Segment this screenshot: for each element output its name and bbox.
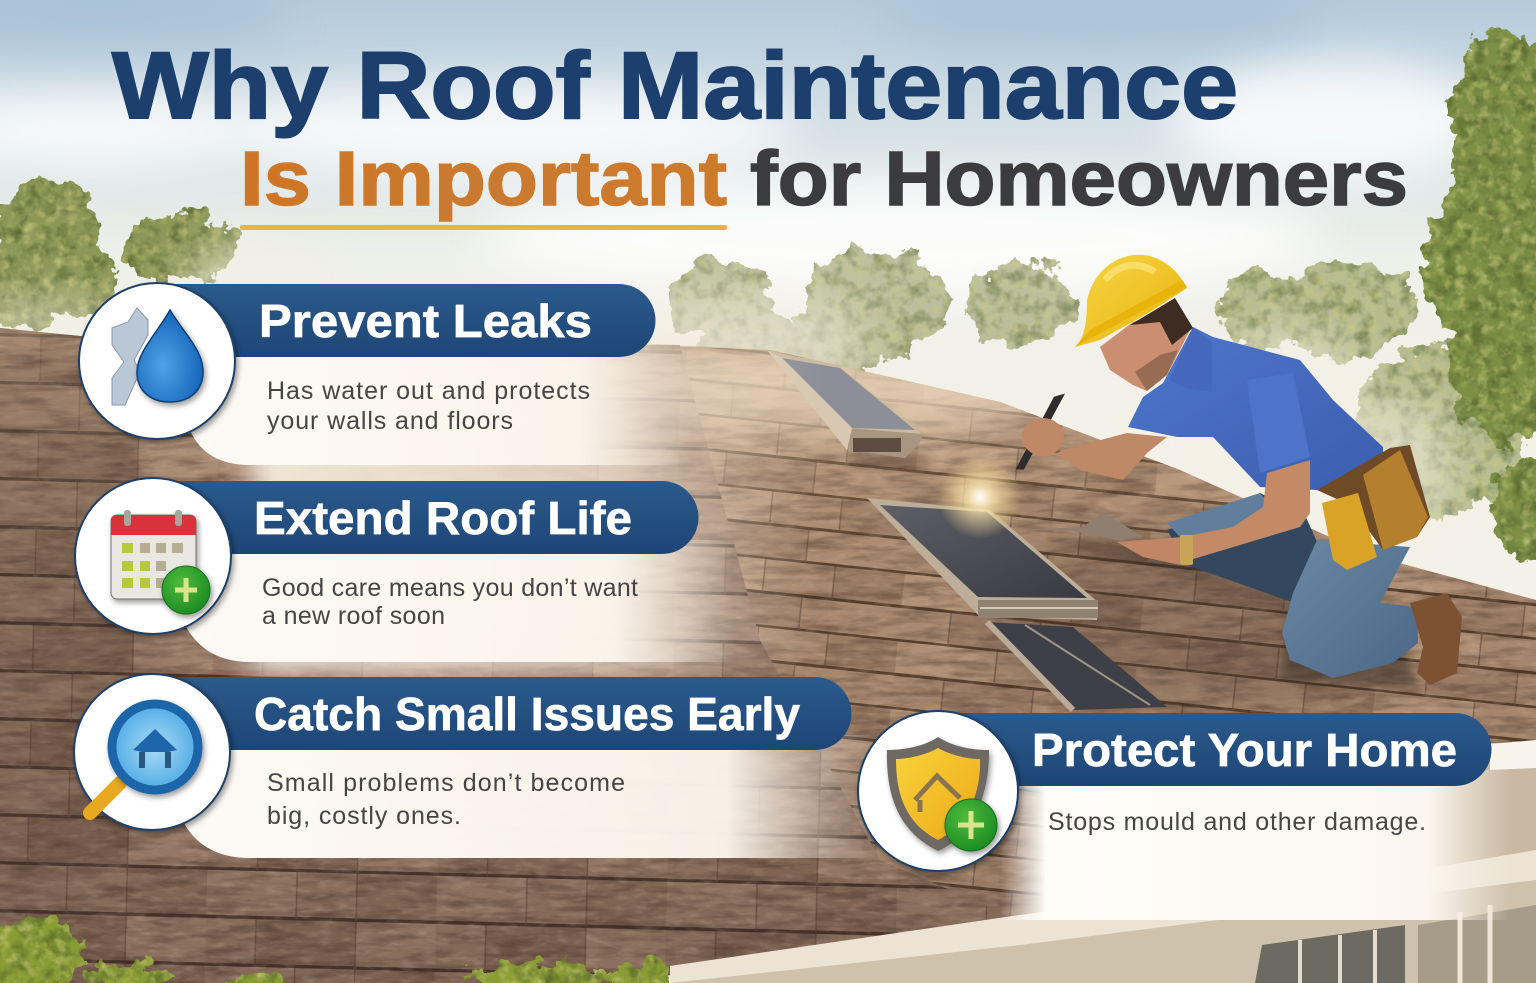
title line 2 dark: for Homeowners [750, 136, 1408, 222]
body text: big, costly ones. [267, 802, 461, 830]
title line 2 accent: Is Important [240, 136, 727, 222]
shirt [1128, 327, 1383, 490]
icon: shield with house and plus [858, 711, 1018, 871]
panel: protect your home [858, 711, 1510, 920]
flashing sheet [1020, 512, 1143, 540]
roof [0, 320, 1536, 983]
front arm with tool [1018, 396, 1167, 480]
heading pill [170, 677, 852, 750]
panel: prevent leaks [79, 283, 690, 465]
skylight: main panel with glare [867, 455, 1098, 620]
heading: Prevent Leaks [259, 295, 592, 347]
heading: Catch Small Issues Early [254, 688, 800, 740]
icon: calendar with plus [75, 478, 231, 634]
back leg [1167, 493, 1325, 605]
skylight: upper vent [767, 350, 932, 469]
body text: Has water out and protects [267, 377, 590, 405]
title [112, 33, 1408, 230]
body card [1000, 770, 1510, 920]
hair [1130, 298, 1193, 345]
trees: background foliage [0, 30, 1536, 560]
body text: a new roof soon [262, 602, 445, 630]
body text: your walls and floors [267, 407, 513, 435]
body text: Stops mould and other damage. [1048, 808, 1426, 836]
hard hat [1075, 255, 1187, 347]
heading pill [170, 481, 698, 554]
body text: Good care means you don’t want [262, 574, 638, 602]
boot [1410, 593, 1462, 685]
house wall and gutter [670, 740, 1536, 983]
worker [1018, 255, 1462, 690]
title line 1: Why Roof Maintenance [112, 33, 1238, 139]
body card [185, 540, 735, 662]
hand and watch [1117, 535, 1193, 565]
body card [185, 735, 880, 858]
mist over roof [250, 345, 810, 675]
tool belt [1317, 445, 1430, 570]
title underline [240, 225, 727, 230]
panel: extend roof life [75, 478, 735, 662]
heading: Protect Your Home [1032, 724, 1457, 776]
body card [190, 340, 690, 465]
stubble [1135, 350, 1178, 391]
neck and face [1100, 310, 1190, 391]
icon: water drop on cracked wall [79, 283, 235, 439]
jeans [1282, 540, 1418, 678]
heading pill [950, 713, 1492, 786]
skylight: lower panel [987, 622, 1167, 710]
shadow on roof [1025, 535, 1420, 690]
icon: magnifying glass with house [74, 674, 230, 830]
heading: Extend Roof Life [254, 492, 632, 544]
body text: Small problems don’t become [267, 769, 625, 797]
heading pill [170, 284, 656, 357]
bushes [0, 919, 672, 983]
main arm [1182, 460, 1310, 560]
panel: catch small issues early [74, 674, 880, 858]
